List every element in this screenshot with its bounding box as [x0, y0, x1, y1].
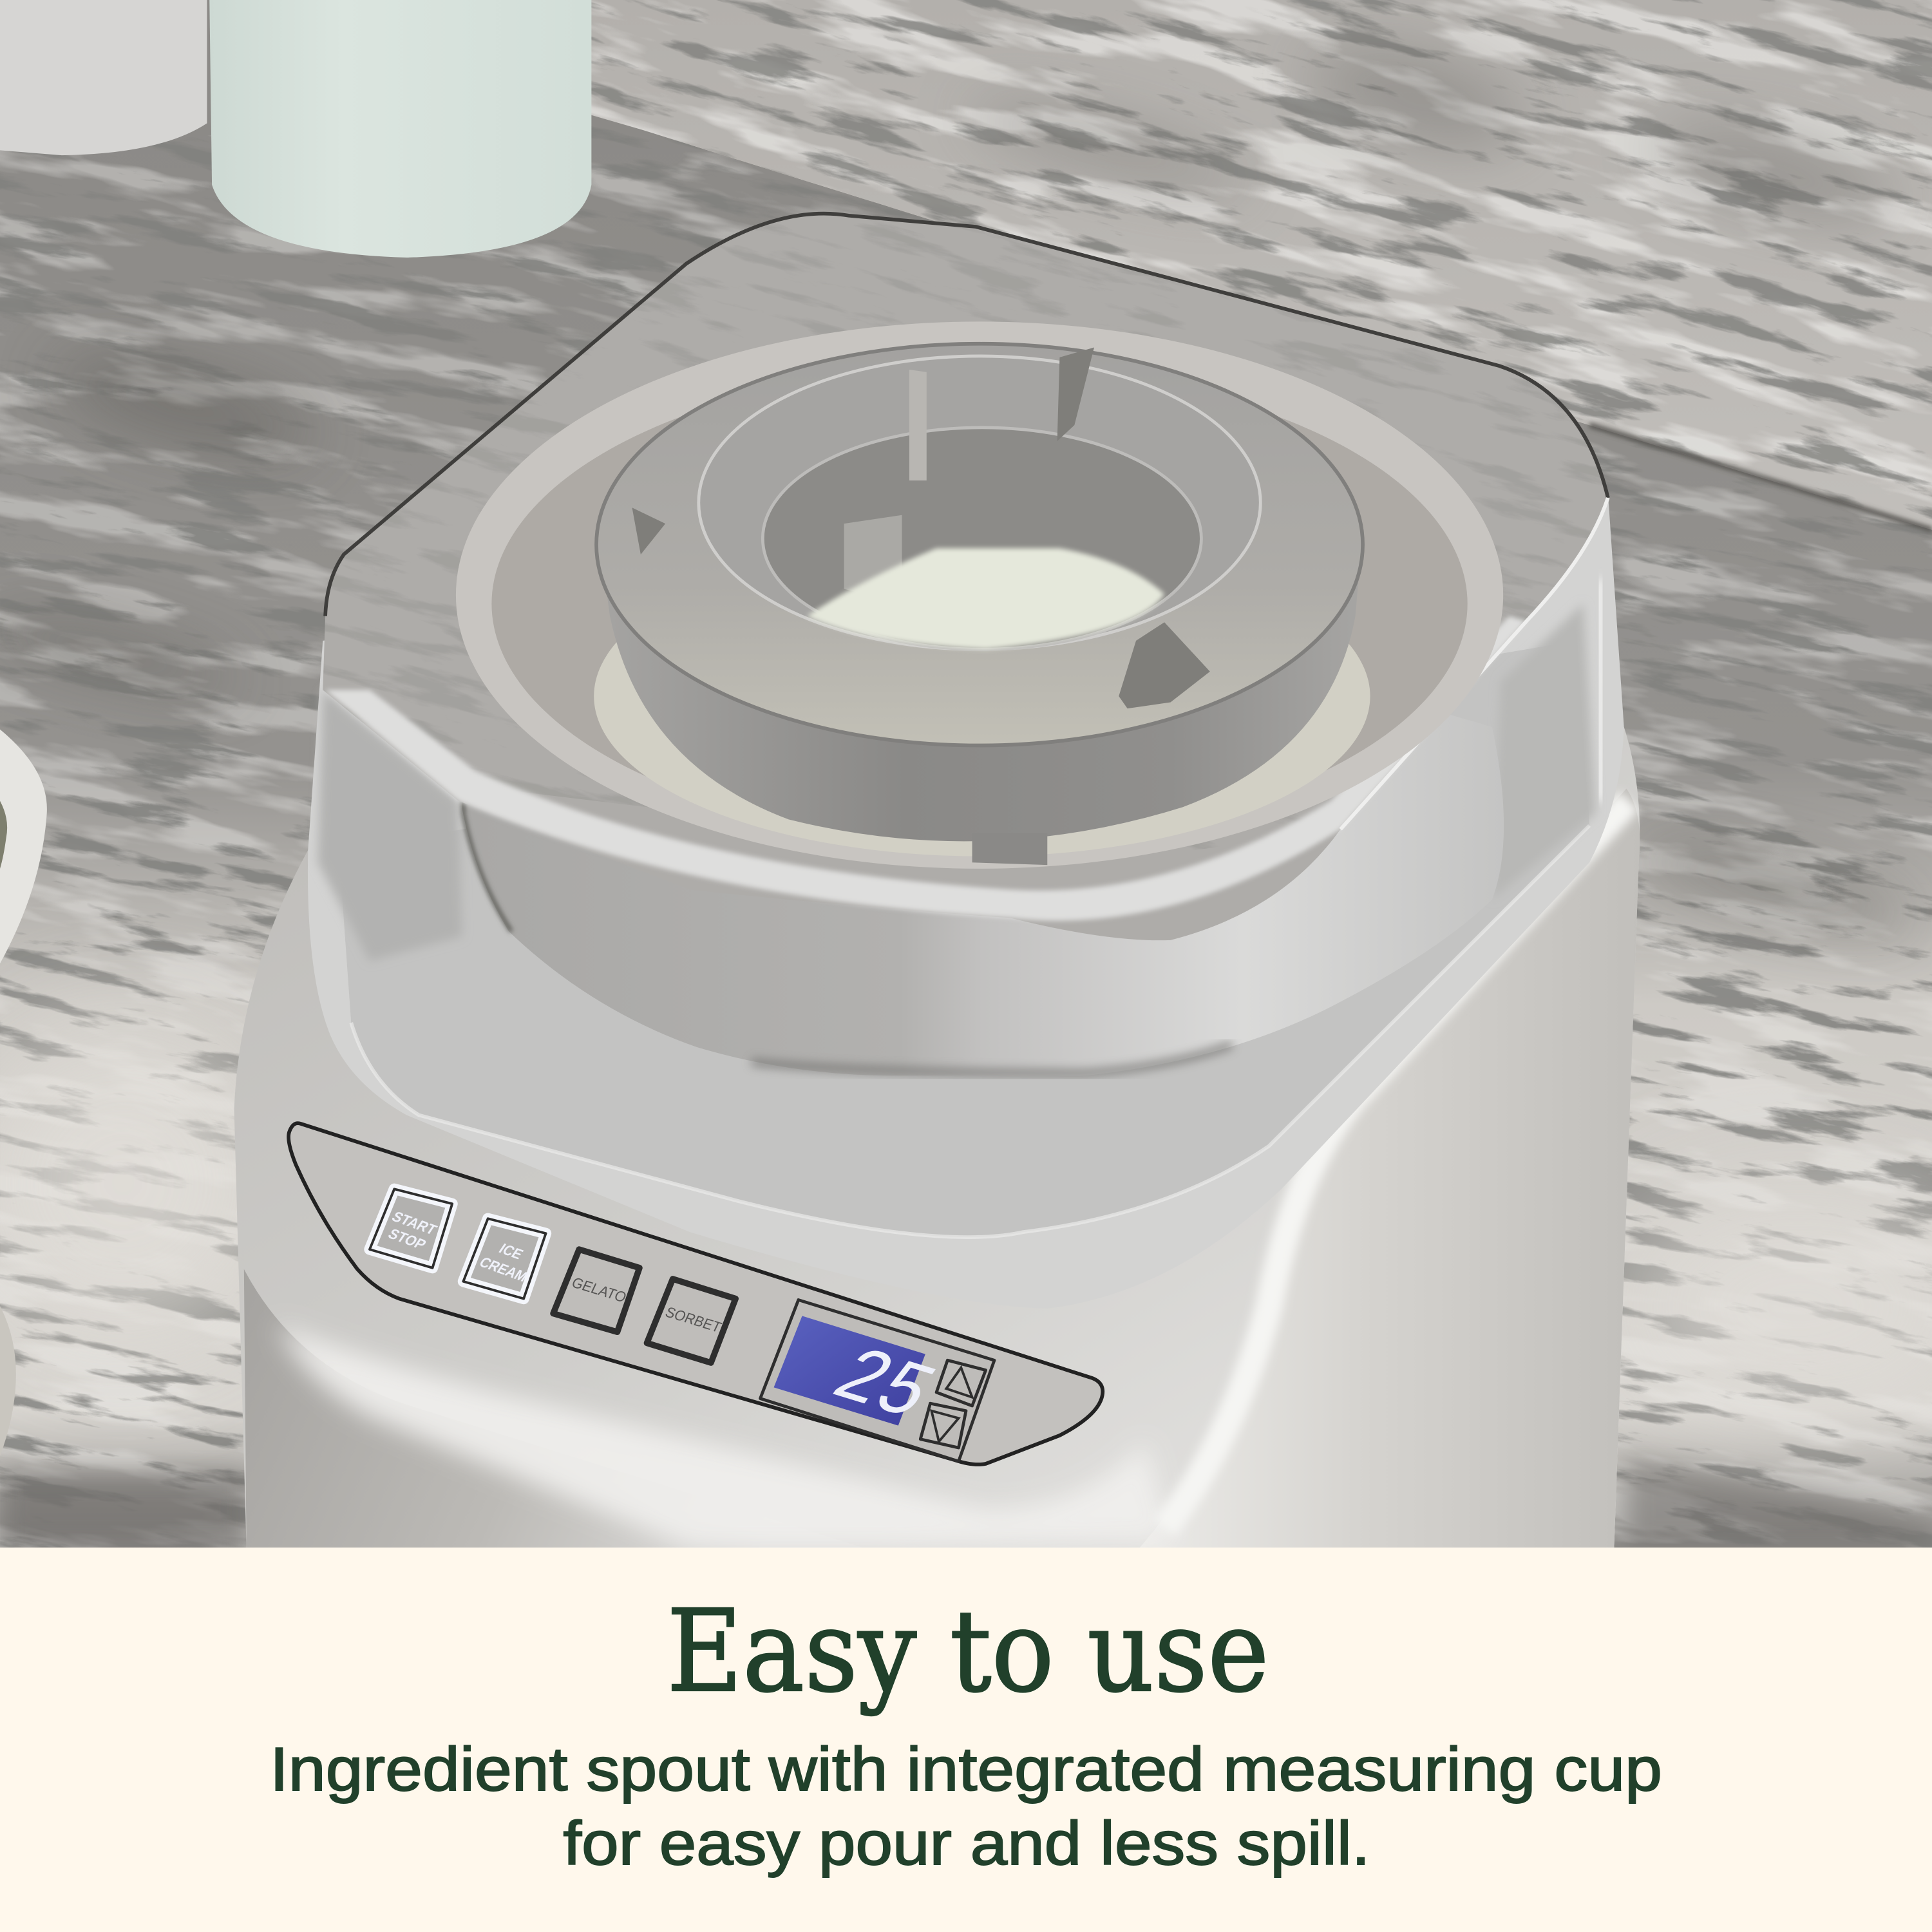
button: ice cream: CREAM	[477, 1254, 531, 1285]
paddle	[844, 515, 902, 604]
button: gelato	[553, 1249, 639, 1332]
button: ice cream	[463, 1218, 546, 1299]
lid inner recess	[491, 367, 1468, 840]
darker marble patches	[0, 338, 1924, 949]
rim lip lower surface	[325, 616, 1527, 921]
display surround	[760, 1300, 994, 1461]
description: for easy pour and less spill.	[563, 1809, 1370, 1878]
side face of body	[1140, 788, 1640, 1548]
button: sorbet	[647, 1279, 735, 1363]
blue lcd display	[774, 1316, 951, 1439]
gray lid	[456, 321, 1503, 869]
bright highlight band	[277, 1325, 1171, 1548]
clear hopper rim	[161, 0, 1608, 940]
spout inner ring	[699, 356, 1260, 649]
button: start stop: START	[389, 1208, 440, 1238]
caption panel	[0, 1548, 1932, 1932]
control panel	[289, 1123, 1103, 1464]
right wall through glass	[1492, 604, 1596, 900]
appliance body	[234, 727, 1640, 1548]
wall base shadow line	[1589, 425, 1932, 530]
ingredient spout	[596, 344, 1363, 865]
title: Easy to use	[667, 1586, 1269, 1718]
lower front brushed face	[244, 1269, 862, 1548]
button: ice cream: ICE	[496, 1240, 526, 1262]
button: start stop	[370, 1189, 452, 1268]
right bright glass edge	[1599, 579, 1602, 801]
white mixture under lid	[594, 536, 1370, 857]
button: gelato: GELATO	[569, 1274, 629, 1305]
clear hopper skirt	[308, 493, 1624, 1309]
white canister	[0, 0, 207, 155]
body shoulder highlight	[1164, 801, 1629, 1528]
skirt inner band	[339, 641, 1589, 1237]
white bowl at left	[0, 730, 47, 963]
marble backsplash wall	[591, 0, 1932, 529]
up button	[936, 1360, 986, 1406]
second dish at left	[0, 1306, 16, 1456]
measuring cup opening	[762, 428, 1201, 649]
rim top edge line	[325, 214, 1608, 616]
button: start stop: STOP	[385, 1226, 430, 1253]
button: sorbet: SORBET	[663, 1303, 724, 1336]
rim side highlight	[1341, 498, 1608, 829]
backdrop behind canisters	[0, 0, 690, 166]
description	[270, 1735, 1662, 1878]
mint canister	[209, 0, 591, 258]
left wall through glass	[318, 690, 462, 961]
inner bowl	[462, 579, 1504, 1075]
description: Ingredient spout with integrated measuring cup	[270, 1735, 1662, 1804]
paddle foot	[972, 833, 1047, 865]
bowl bottom shadow	[752, 1045, 1232, 1073]
spout tabs	[632, 348, 1210, 708]
wall darker patches	[960, 28, 1903, 240]
down button	[920, 1403, 966, 1448]
bowl dark edge left	[463, 727, 511, 931]
ice cream mixture	[807, 548, 1164, 649]
blue lcd display: 25	[813, 1334, 951, 1439]
skirt inner edge line	[351, 826, 1589, 1237]
